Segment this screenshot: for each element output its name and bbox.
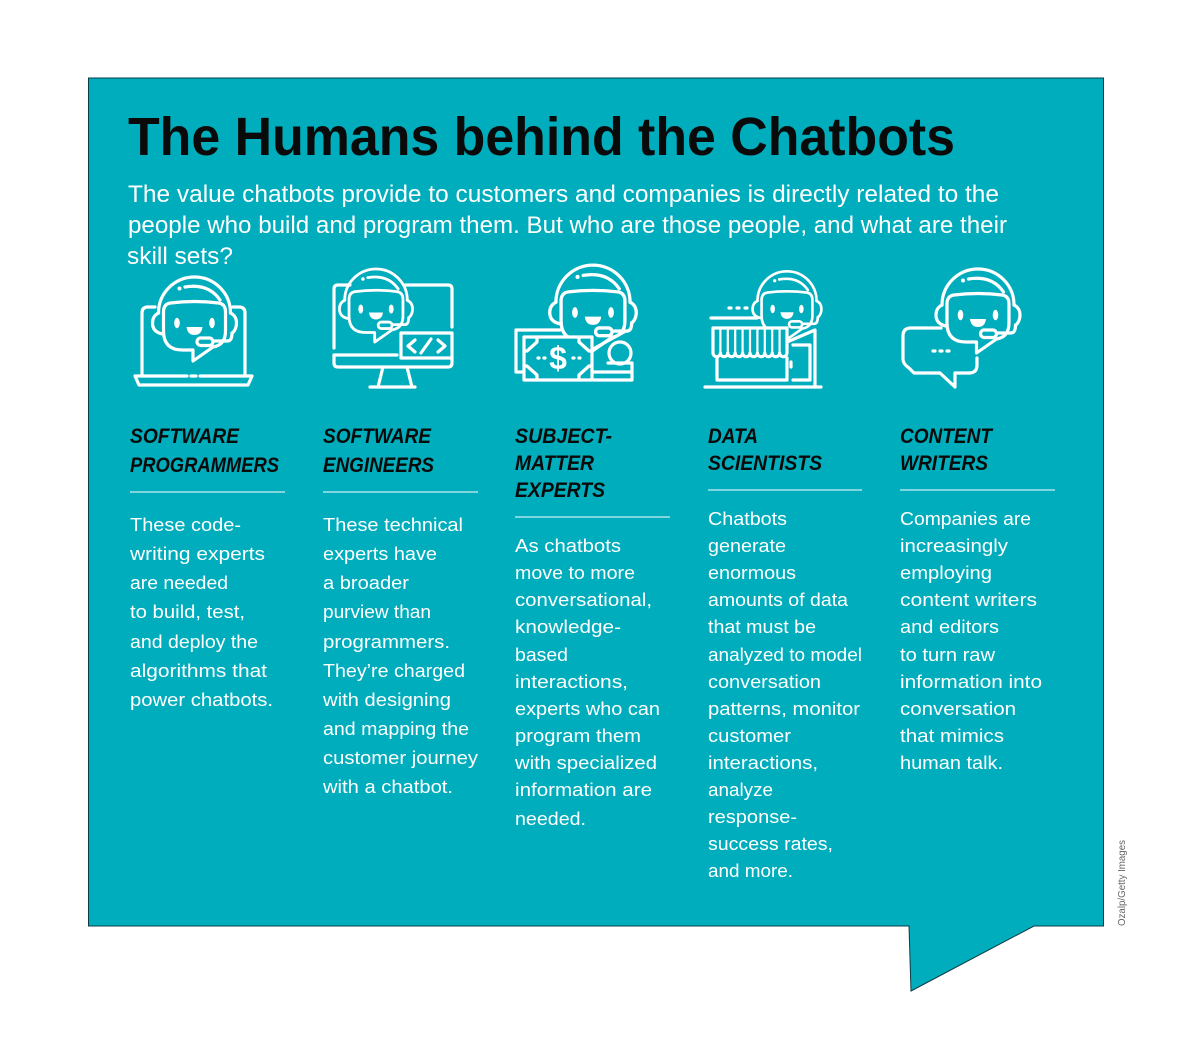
description: data scientists: analyze: [708, 779, 773, 800]
heading: software programmers: SOFTWARE: [130, 424, 240, 448]
description: data scientists: amounts of data: [708, 589, 849, 610]
description: software programmers: algorithms that: [130, 660, 267, 681]
description: data scientists: generate: [708, 535, 786, 556]
description: subject-matter experts: experts who can: [515, 698, 660, 719]
heading: software engineers: [323, 424, 435, 477]
description: software engineers: programmers.: [323, 631, 450, 652]
description: subject-matter experts: with specialized: [514, 752, 657, 773]
description: software engineers: a broader: [323, 572, 409, 593]
description: software engineers: purview than: [323, 601, 431, 622]
photo credit: Ozalp/Getty Images: [1116, 840, 1128, 926]
description: data scientists: response-: [708, 806, 797, 827]
title: The Humans behind the Chatbots: [128, 107, 955, 167]
description: software engineers: [322, 514, 479, 797]
description: content writers: and editors: [900, 616, 999, 637]
icon: chatbot on monitor with code: [334, 269, 452, 387]
column: software engineers: [322, 424, 479, 797]
description: subject-matter experts: based: [515, 644, 568, 665]
heading: subject-matter experts: EXPERTS: [515, 478, 606, 502]
description: software programmers: writing experts: [129, 543, 265, 564]
description: subject-matter experts: interactions,: [515, 671, 628, 692]
description: software engineers: with designing: [322, 689, 451, 710]
description: software programmers: are needed: [130, 572, 228, 593]
intro text: skill sets?: [127, 243, 233, 270]
icon: chatbot with storefront: [705, 271, 821, 387]
description: subject-matter experts: move to more: [515, 562, 635, 583]
heading: data scientists: DATA: [708, 424, 758, 448]
heading: subject-matter experts: MATTER: [515, 451, 594, 475]
heading: software programmers: PROGRAMMERS: [130, 453, 280, 477]
description: data scientists: enormous: [708, 562, 796, 583]
description: software programmers: These code-: [130, 514, 241, 535]
description: data scientists: analyzed to model: [708, 644, 862, 665]
heading: data scientists: [708, 424, 823, 475]
description: data scientists: Chatbots: [708, 508, 787, 529]
description: software engineers: These technical: [323, 514, 463, 535]
dollar sign: $: [549, 340, 567, 376]
description: subject-matter experts: [514, 535, 660, 829]
description: data scientists: customer: [708, 725, 791, 746]
icon: chatbot with money and coin: [516, 265, 636, 380]
description: software engineers: with a chatbot.: [322, 776, 453, 797]
description: content writers: human talk.: [900, 752, 1003, 773]
heading: content writers: CONTENT: [900, 424, 994, 448]
icon: chatbot on laptop: [135, 277, 252, 385]
heading: software programmers: [130, 424, 280, 477]
column: software programmers: [129, 424, 285, 710]
description: software engineers: customer journey: [323, 747, 479, 768]
heading: software engineers: ENGINEERS: [323, 453, 435, 477]
speech bubble panel: [88, 78, 1104, 991]
description: content writers: to turn raw: [900, 644, 996, 665]
description: content writers: content writers: [900, 589, 1037, 610]
heading: subject-matter experts: SUBJECT-: [515, 424, 612, 448]
column: content writers: [900, 424, 1055, 773]
description: content writers: conversation: [900, 698, 1016, 719]
column: subject-matter experts: [514, 424, 670, 829]
description: software programmers: [129, 514, 273, 710]
description: content writers: that mimics: [900, 725, 1004, 746]
description: data scientists: [708, 508, 862, 881]
description: subject-matter experts: program them: [515, 725, 641, 746]
heading: data scientists: SCIENTISTS: [708, 451, 823, 475]
description: data scientists: patterns, monitor: [708, 698, 860, 719]
description: data scientists: interactions,: [708, 752, 818, 773]
heading: software engineers: SOFTWARE: [323, 424, 432, 448]
heading: content writers: WRITERS: [900, 451, 989, 475]
description: software engineers: and mapping the: [323, 718, 469, 739]
intro text: people who build and program them. But who are those people, and what are their: [128, 212, 1007, 239]
description: content writers: [900, 508, 1042, 773]
description: software programmers: and deploy the: [130, 631, 258, 652]
description: software engineers: They’re charged: [323, 660, 465, 681]
description: subject-matter experts: conversational,: [515, 589, 652, 610]
icon: chatbot with chat bubble: [903, 269, 1020, 387]
description: subject-matter experts: As chatbots: [515, 535, 621, 556]
description: subject-matter experts: needed.: [515, 808, 586, 829]
description: software programmers: power chatbots.: [130, 689, 273, 710]
description: content writers: increasingly: [900, 535, 1009, 556]
description: subject-matter experts: knowledge-: [515, 616, 621, 637]
intro text: [127, 181, 1007, 270]
description: content writers: employing: [900, 562, 992, 583]
description: data scientists: and more.: [708, 860, 793, 881]
description: data scientists: that must be: [708, 616, 816, 637]
intro text: The value chatbots provide to customers and companies is directly related to the: [128, 181, 999, 208]
description: software engineers: experts have: [323, 543, 437, 564]
description: content writers: information into: [900, 671, 1042, 692]
description: content writers: Companies are: [900, 508, 1031, 529]
description: data scientists: conversation: [708, 671, 821, 692]
description: software programmers: to build, test,: [130, 601, 245, 622]
description: subject-matter experts: information are: [515, 779, 652, 800]
heading: subject-matter experts: [515, 424, 612, 502]
description: data scientists: success rates,: [708, 833, 833, 854]
column: data scientists: [708, 424, 862, 881]
heading: content writers: [900, 424, 994, 475]
